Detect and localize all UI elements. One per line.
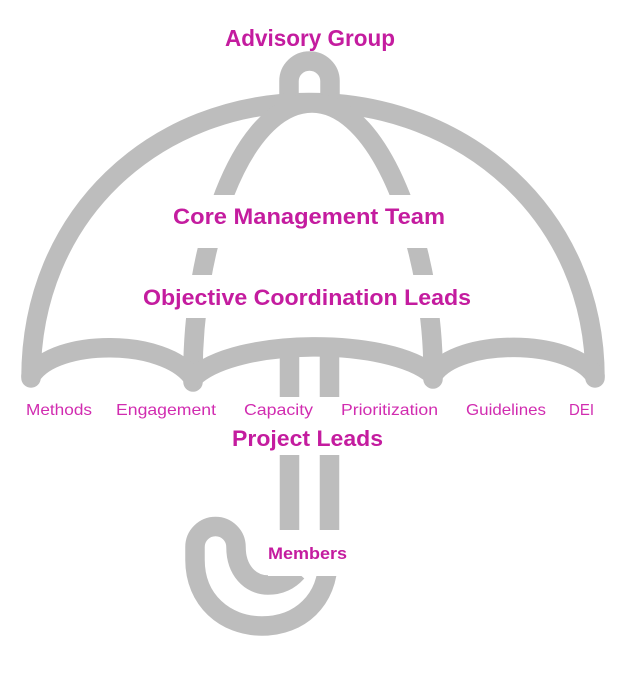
heading: Objective Coordination Leads: Objective Coordination Leads	[143, 285, 471, 310]
icon: canopy ribs	[193, 103, 433, 382]
heading: Core Management Team: Core Management Team	[173, 204, 445, 229]
label: Methods: Methods	[26, 402, 92, 419]
heading: Members: Members	[268, 544, 347, 563]
label: Prioritization: Prioritization	[341, 402, 438, 419]
label: Capacity: Capacity	[244, 402, 313, 419]
label: Engagement: Engagement	[116, 402, 217, 419]
heading: Project Leads: Project Leads	[232, 426, 383, 451]
icon: umbrella shaft	[290, 355, 330, 530]
objective labels	[26, 402, 594, 419]
umbrella illustration	[31, 61, 595, 626]
white gaps behind labels	[130, 195, 490, 576]
icon: umbrella top loop	[289, 61, 330, 100]
icon: umbrella handle	[195, 526, 328, 626]
label: DEI: DEI	[569, 402, 594, 419]
label: Guidelines: Guidelines	[466, 402, 546, 419]
heading: Advisory Group: Advisory Group	[225, 25, 395, 51]
icon: canopy scallops	[31, 347, 595, 378]
icon: umbrella canopy	[31, 102, 595, 378]
